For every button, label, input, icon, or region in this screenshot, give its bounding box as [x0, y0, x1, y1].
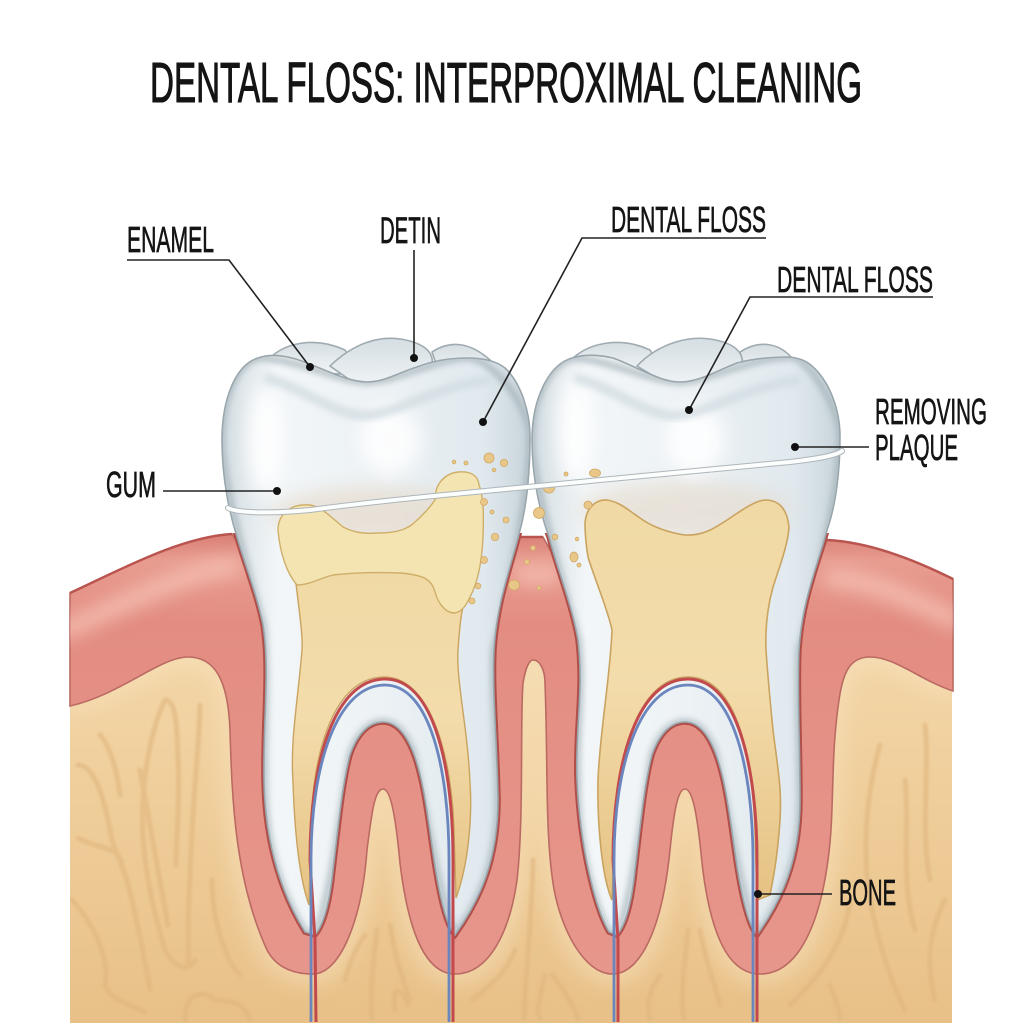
bone texture	[72, 700, 945, 1020]
label: enamel	[127, 219, 314, 371]
label: enamel: ENAMEL	[127, 219, 214, 260]
enamel shell	[222, 355, 530, 935]
jaw bone	[70, 658, 952, 1023]
dentin core	[585, 500, 789, 900]
label: detin: DETIN	[380, 210, 441, 251]
enamel shell	[532, 355, 840, 935]
label: bone: BONE	[839, 872, 896, 913]
label: gum	[106, 464, 281, 505]
gum top edges	[70, 534, 953, 593]
label: removing plaque: PLAQUE	[875, 427, 958, 468]
dentin crown blob	[278, 472, 483, 613]
label: bone	[754, 872, 896, 913]
blood vessels: right tooth	[613, 679, 757, 1022]
back cusps	[270, 338, 490, 392]
label: dental floss (left)	[479, 199, 766, 426]
bone highlight near gum	[70, 657, 953, 974]
enamel shading	[222, 358, 530, 935]
back cusps	[573, 338, 792, 392]
label: dental floss (right)	[685, 259, 933, 414]
label: detin	[380, 210, 441, 362]
blood vessels: left tooth	[310, 679, 453, 1022]
gum tissue	[69, 532, 954, 975]
right tooth	[532, 338, 840, 935]
label: removing plaque	[791, 391, 987, 468]
plaque particles	[452, 453, 600, 604]
pulp chamber body	[292, 565, 471, 905]
enamel shading	[532, 357, 840, 935]
label: dental floss (left): DENTAL FLOSS	[611, 199, 766, 240]
gum fold highlights	[60, 566, 960, 632]
root-side gum shadow	[232, 533, 829, 940]
label: gum: GUM	[106, 464, 156, 505]
left tooth	[222, 338, 530, 935]
dental floss	[228, 451, 842, 512]
